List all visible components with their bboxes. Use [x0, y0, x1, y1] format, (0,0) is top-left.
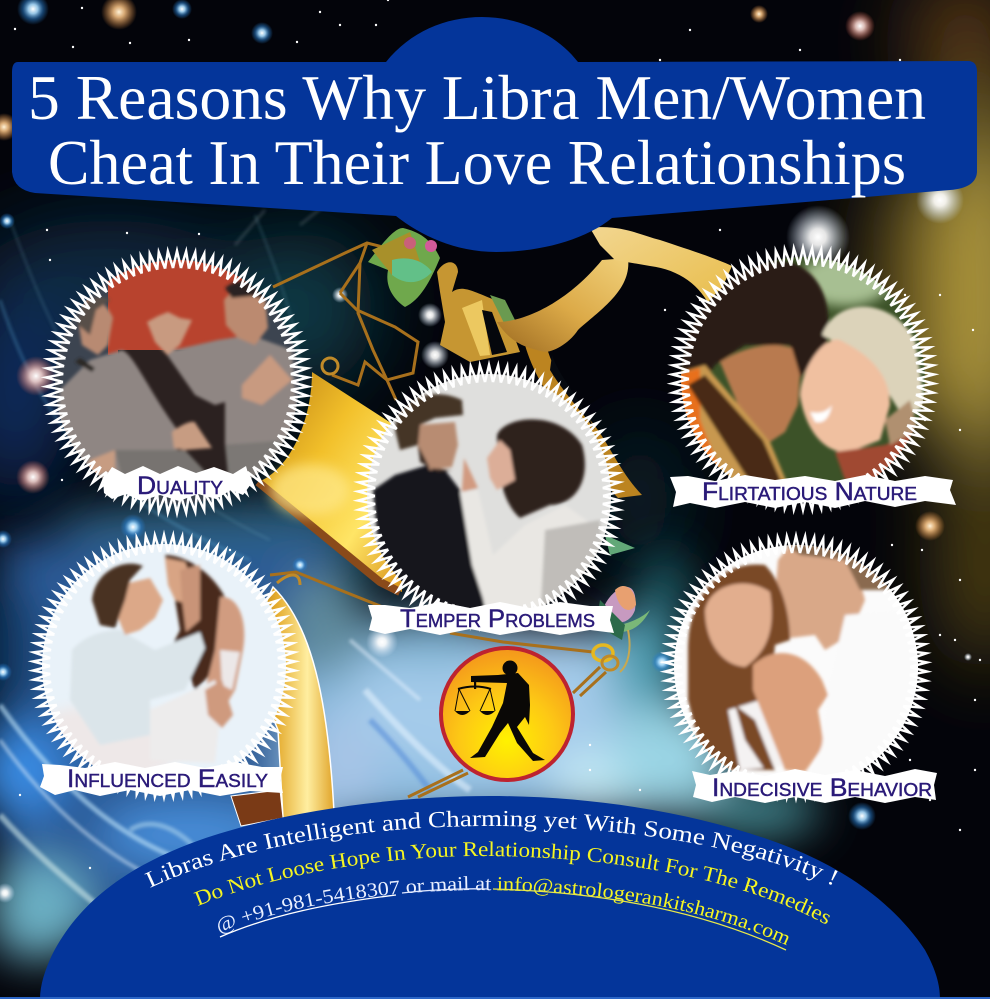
curved text: contact details: @ +91-981-5418307 or mail at info@astrologerankitsharma.com [218, 876, 788, 946]
ribbon beam: centre [437, 262, 520, 362]
flower ornament bottom [593, 535, 650, 672]
label: Duality: Duality [137, 472, 223, 500]
label: Temper Problems: Temper Problems [400, 605, 595, 633]
photo circle: Influenced Easily [28, 530, 300, 802]
photo circle: Duality [40, 246, 314, 518]
title line 2: Cheat In Their Love Relationships [48, 127, 906, 198]
left man [57, 348, 178, 478]
lower gold pan [231, 575, 334, 826]
right man [165, 335, 300, 445]
woman [497, 419, 585, 518]
photo circle: Indecisive Behavior [660, 530, 932, 804]
label: Temper Problems [368, 602, 614, 635]
man [680, 261, 829, 390]
woman [160, 555, 230, 690]
curved text: yellow remedy line: Do Not Loose Hope In Your Relationship Consult For The Remedies [194, 841, 830, 924]
panel: bottom message dome [0, 796, 990, 999]
banner shape [12, 17, 977, 252]
ribbon beam: flag [590, 227, 732, 310]
illustration: golden libra scales [231, 227, 732, 826]
woman [822, 307, 925, 420]
flower ornament top [368, 228, 440, 307]
woman [688, 564, 790, 770]
upper gold pan [258, 372, 402, 592]
man shirt [816, 610, 918, 771]
man [70, 630, 205, 745]
label: Influenced Easily [40, 762, 283, 796]
icon: man holding scales [455, 660, 545, 761]
curved text: intro line: Libras Are Intelligent and Charming yet With Some Negativity ! [144, 810, 838, 888]
contact underlines [220, 889, 786, 950]
icon: libra zodiac emblem [441, 648, 573, 780]
man [775, 545, 865, 650]
photo circle: Flirtatious Nature [666, 242, 940, 516]
photo circle: Temper Problems [352, 360, 626, 632]
label: Flirtatious Nature: Flirtatious Nature [702, 478, 917, 506]
label: Flirtatious Nature [670, 475, 956, 508]
label: Influenced Easily: Influenced Easily [67, 765, 268, 793]
panel: title banner [12, 17, 977, 252]
label: Indecisive Behavior: Indecisive Behavior [712, 774, 932, 802]
chains [270, 243, 606, 797]
title line 1: 5 Reasons Why Libra Men/Women [28, 62, 926, 133]
ribbon beam: tail [525, 340, 642, 498]
label: Duality [103, 466, 251, 501]
label: Indecisive Behavior [692, 769, 937, 803]
man [373, 465, 487, 620]
ribbon beam: body [497, 258, 628, 352]
